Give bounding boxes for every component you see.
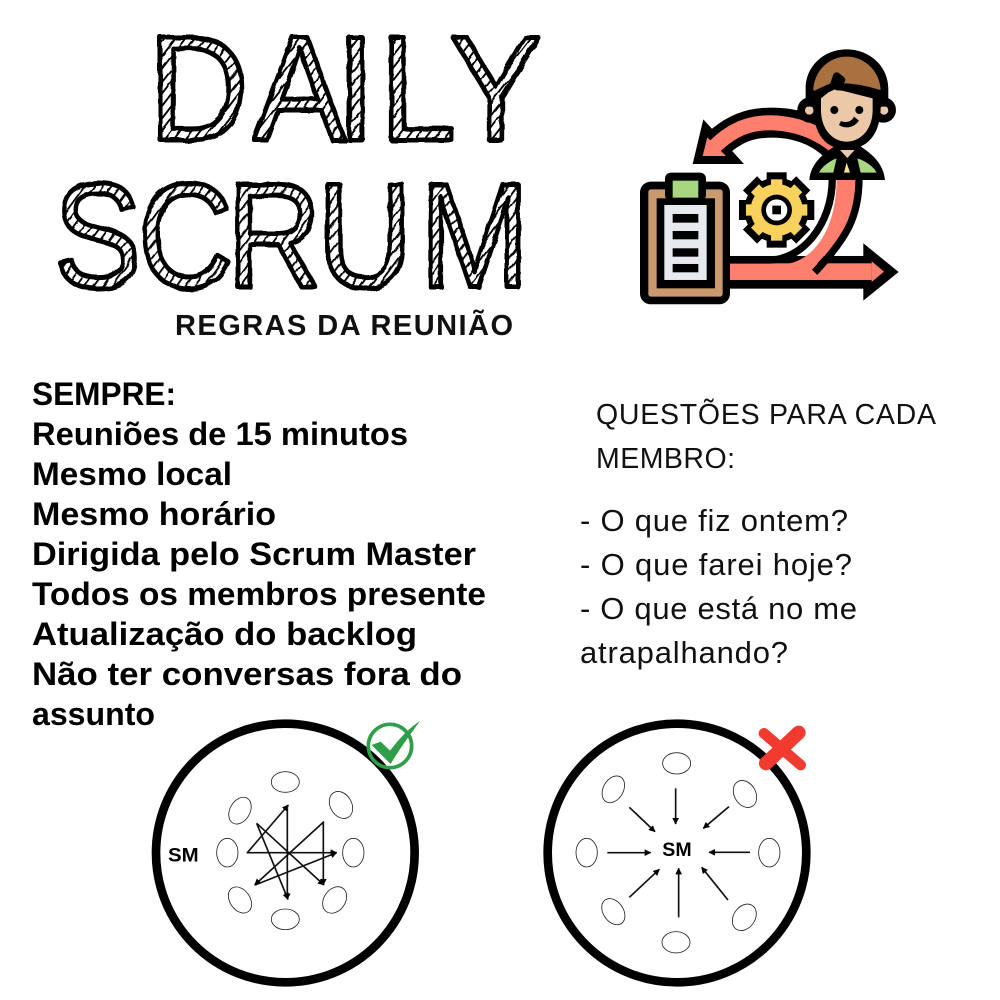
outer circle [156,724,415,982]
icon: clipboard [640,173,730,304]
SM label: SM [168,846,199,867]
rule 7 continued: assunto [32,696,155,732]
head [806,49,888,149]
rules heading: SEMPRE: [32,376,176,412]
ears [797,97,823,123]
rule 4: Dirigida pelo Scrum Master [32,536,476,572]
icon: person [797,49,896,180]
bottom arrow [727,243,899,301]
curved arrow body [787,178,855,264]
inward arrows [607,788,750,917]
title line: SCRUM: SCRUM [54,152,529,319]
outer circle [548,724,806,982]
questions heading: QUESTÕES PARA CADA [596,399,936,431]
rule 1: Reuniões de 15 minutos [32,416,408,452]
curve inner edge [730,178,832,260]
team members [576,753,780,953]
question 1: - O que fiz ontem? [580,503,848,538]
diagram: correct daily scrum [156,721,420,982]
question 3 continued: atrapalhando? [580,635,788,670]
icon: red cross [764,733,801,765]
subtitle: REGRAS DA REUNIÃO [175,308,513,342]
question 3: - O que está no me [580,591,857,626]
top curved arrow [693,119,837,164]
body [809,145,885,180]
rule 5: Todos os membros presente [32,576,486,612]
title line: DAILY: DAILY [149,6,541,172]
questions block [580,399,936,670]
question 2: - O que farei hoje? [580,547,852,582]
rule 3: Mesmo horário [32,496,276,532]
icon: check mark [368,721,420,768]
team members [217,772,364,930]
curve outer edge [815,178,859,272]
rules list [32,376,486,732]
diagram: incorrect daily scrum [548,724,806,982]
rule 7: Não ter conversas fora do [32,656,462,692]
rule 2: Mesmo local [32,456,232,492]
SM label: SM [662,840,692,861]
questions heading line 2: MEMBRO: [596,443,735,475]
rule 6: Atualização do backlog [32,616,417,652]
crossing arrows [247,805,337,899]
icon: scrum cycle [640,49,899,304]
title [54,6,541,319]
icon: gear [739,172,814,248]
